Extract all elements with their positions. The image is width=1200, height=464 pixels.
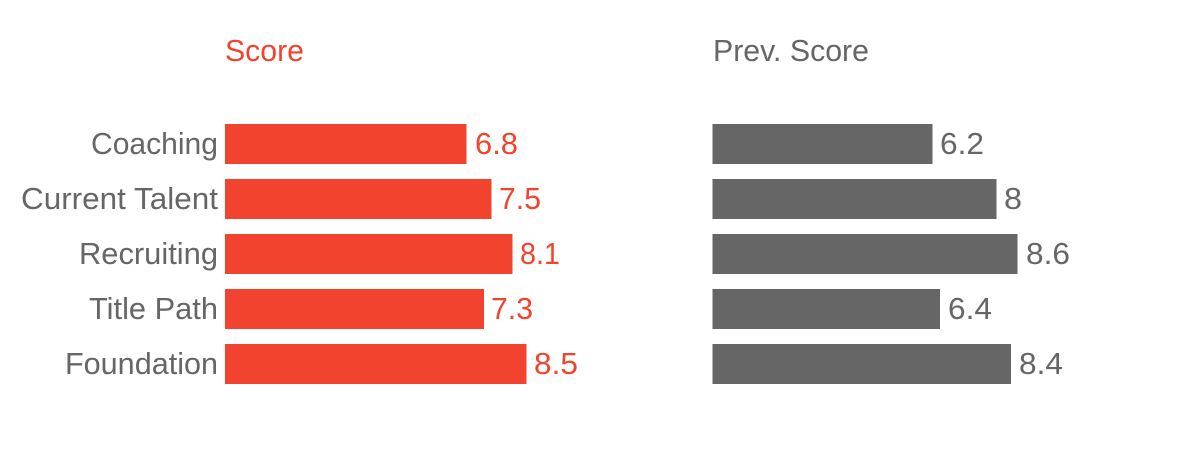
values: score: 6.8 — [475, 126, 518, 161]
values: score: 7.5 — [499, 181, 541, 216]
values: previous score: 8 — [1004, 181, 1022, 216]
row labels: Current Talent — [21, 181, 218, 216]
row labels: Foundation — [65, 346, 218, 381]
values: score: 7.3 — [491, 291, 533, 326]
panel: score — [225, 33, 578, 384]
row labels: Recruiting — [79, 236, 218, 271]
values: score: 8.5 — [534, 346, 578, 381]
values: previous score: 8.4 — [1019, 346, 1063, 381]
values: previous score: 8.6 — [1026, 236, 1070, 271]
panel: previous score — [712, 33, 1070, 384]
values: previous score: 6.4 — [948, 291, 992, 326]
bars: score — [225, 124, 526, 384]
values: previous score: 6.2 — [940, 126, 984, 161]
row labels: Title Path — [89, 291, 218, 326]
values: score: 8.1 — [520, 236, 560, 271]
heading: score: Score — [225, 33, 304, 68]
row labels — [21, 126, 218, 381]
values: previous score — [940, 126, 1070, 381]
heading: previous score: Prev. Score — [713, 33, 869, 68]
bars: previous score — [712, 124, 1018, 384]
values: score — [475, 126, 578, 381]
row labels: Coaching — [91, 126, 218, 161]
